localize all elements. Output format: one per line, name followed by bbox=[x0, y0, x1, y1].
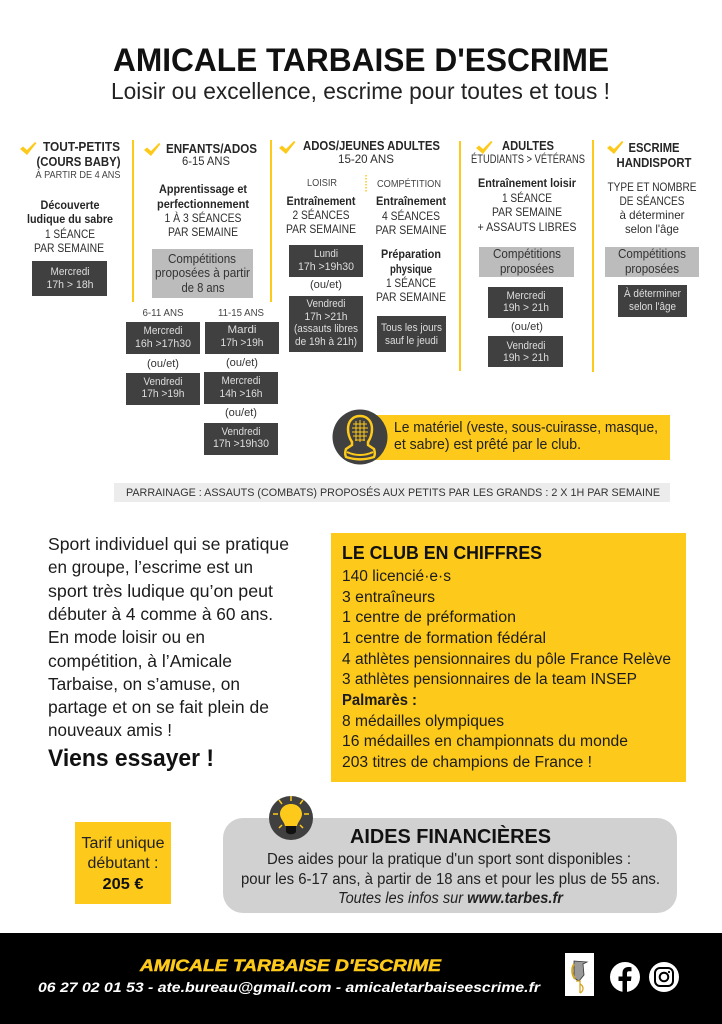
panel: le club en chiffres: 8 médailles olympiques bbox=[342, 713, 504, 730]
callout: compétitions enfants: proposées à partir bbox=[155, 266, 250, 280]
icon: light bulb bbox=[269, 796, 313, 840]
icon: instagram bbox=[649, 962, 679, 992]
text block: présentation: nouveaux amis ! bbox=[48, 720, 172, 740]
text: description adultes: Entraînement loisir bbox=[478, 176, 576, 190]
schedule box: lundi bbox=[289, 245, 363, 277]
schedule box: à déterminer: selon l'âge bbox=[629, 301, 676, 313]
panel: enfants/ados bbox=[126, 142, 279, 455]
text: description tout-petits bbox=[27, 198, 113, 255]
schedule box: à déterminer bbox=[618, 285, 687, 317]
text: matériel: et sabre) est prêté par le club. bbox=[394, 437, 581, 453]
schedule box: vendredi ados: 17h >21h bbox=[304, 311, 348, 323]
callout: compétitions enfants: de 8 ans bbox=[182, 281, 224, 295]
panel: le club en chiffres: 140 licencié·e·s bbox=[342, 568, 451, 585]
callout: tarif: Tarif unique bbox=[82, 835, 164, 852]
footer bbox=[0, 933, 722, 1024]
text: description handisport: selon l'âge bbox=[625, 222, 679, 236]
text: compétition: Entraînement bbox=[376, 194, 446, 208]
label: loisir: LOISIR bbox=[307, 178, 337, 189]
panel: le club en chiffres: 16 médailles en championnats du monde bbox=[342, 733, 628, 750]
text: aides: Toutes les infos sur www.tarbes.fr bbox=[338, 890, 564, 907]
icon: check enfants bbox=[144, 143, 160, 156]
text: compétition: physique bbox=[390, 262, 432, 276]
panel: le club en chiffres: 3 entraîneurs bbox=[342, 589, 435, 606]
label: ou/et: (ou/et) bbox=[225, 407, 257, 419]
callout: tarif: 205 € bbox=[102, 876, 144, 893]
schedule box: vendredi 11-15 bbox=[204, 423, 278, 455]
label: ou/et: (ou/et) bbox=[310, 279, 342, 291]
panel: escrime handisport bbox=[605, 141, 699, 317]
icon: check tout-petits bbox=[20, 142, 36, 155]
panel: le club en chiffres: LE CLUB EN CHIFFRES bbox=[342, 543, 542, 563]
text block: présentation bbox=[48, 534, 289, 772]
text block: présentation: Viens essayer ! bbox=[48, 745, 214, 772]
callout: compétitions handisport: Compétitions bbox=[618, 247, 686, 261]
heading: escrime handisport: HANDISPORT bbox=[616, 156, 692, 170]
heading: escrime handisport bbox=[616, 141, 692, 170]
schedule box: mercredi 11-15 bbox=[204, 372, 278, 404]
panel: le club en chiffres: 4 athlètes pensionnaires du pôle France Relève bbox=[342, 651, 671, 668]
schedule box: vendredi ados bbox=[289, 296, 363, 352]
schedule box: mardi 11-15: 17h >19h bbox=[220, 337, 264, 349]
text block: présentation: Tarbaise, on s’amuse, on bbox=[48, 674, 240, 694]
schedule box: vendredi adultes bbox=[488, 336, 563, 367]
schedule box: mercredi 6-11 bbox=[126, 322, 200, 354]
text: compétition: 1 SÉANCE bbox=[386, 275, 436, 290]
text: description enfants bbox=[157, 182, 249, 239]
callout: parrainage bbox=[114, 483, 670, 502]
heading: tout-petits: À PARTIR DE 4 ANS bbox=[36, 168, 121, 181]
heading: enfants/ados: 6-15 ANS bbox=[182, 154, 230, 168]
schedule box: mercredi: Mercredi bbox=[50, 266, 90, 278]
schedule box: mercredi adultes bbox=[488, 287, 563, 318]
panel: le club en chiffres: Palmarès : bbox=[342, 692, 417, 709]
schedule box: vendredi ados: (assauts libres bbox=[294, 323, 358, 335]
heading: adultes: ÉTUDIANTS > VÉTÉRANS bbox=[471, 151, 585, 166]
callout: tarif: débutant : bbox=[88, 855, 158, 872]
text: matériel: Le matériel (veste, sous-cuirasse, masque, bbox=[394, 420, 658, 436]
label: 11-15 ans: 11-15 ANS bbox=[218, 308, 264, 319]
heading: ados/jeunes adultes bbox=[303, 139, 440, 166]
text: description tout-petits: PAR SEMAINE bbox=[34, 241, 104, 255]
panel: le club en chiffres: 1 centre de préformation bbox=[342, 609, 516, 626]
icon: check ados bbox=[279, 141, 296, 154]
callout: compétitions adultes: proposées bbox=[500, 262, 554, 276]
heading: enfants/ados: ENFANTS/ADOS bbox=[166, 142, 257, 156]
callout: parrainage: PARRAINAGE : ASSAUTS (COMBATS) PROPOSÉS AUX PETITS PAR LES GRANDS : 2 X 1H PAR SEMAINE bbox=[126, 486, 660, 499]
schedule box: mercredi adultes: Mercredi bbox=[506, 290, 546, 302]
schedule box: lundi: 17h >19h30 bbox=[298, 261, 354, 273]
subtitle: Loisir ou excellence, escrime pour toutes et tous ! bbox=[111, 78, 610, 104]
text: description adultes: PAR SEMAINE bbox=[492, 205, 562, 219]
schedule box: lundi: Lundi bbox=[314, 248, 338, 260]
heading: enfants/ados bbox=[166, 142, 257, 168]
label: ou/et: (ou/et) bbox=[511, 321, 543, 333]
callout: tarif bbox=[75, 822, 171, 904]
icon: club logo bbox=[565, 953, 594, 996]
panel: le club en chiffres bbox=[331, 533, 686, 782]
text: description adultes bbox=[478, 176, 576, 234]
icon: fencing mask bbox=[332, 410, 388, 464]
text: aides: Des aides pour la pratique d'un sport sont disponibles : bbox=[267, 851, 631, 868]
panel: le club en chiffres: 1 centre de formation fédéral bbox=[342, 630, 546, 647]
heading: ados/jeunes adultes: 15-20 ANS bbox=[338, 152, 394, 166]
schedule box: mercredi 6-11: Mercredi bbox=[144, 325, 182, 337]
label: ou/et: (ou/et) bbox=[147, 358, 179, 370]
schedule box: tous les jours bbox=[377, 316, 446, 352]
text: description enfants: perfectionnement bbox=[157, 197, 249, 211]
schedule box: à déterminer: À déterminer bbox=[624, 287, 681, 300]
schedule box: mercredi adultes: 19h > 21h bbox=[503, 302, 549, 314]
text: description tout-petits: 1 SÉANCE bbox=[45, 226, 95, 241]
label: 6-11 ans: 6-11 ANS bbox=[142, 308, 184, 319]
text: compétition bbox=[376, 194, 446, 304]
schedule box: vendredi 6-11 bbox=[126, 373, 200, 405]
schedule box: vendredi 11-15: 17h >19h30 bbox=[213, 438, 269, 450]
schedule box: mardi 11-15: Mardi bbox=[228, 324, 256, 336]
text: matériel bbox=[394, 420, 658, 453]
text: compétition: 4 SÉANCES bbox=[382, 208, 440, 223]
title: AMICALE TARBAISE D'ESCRIME bbox=[113, 42, 609, 78]
callout: compétitions enfants bbox=[152, 249, 253, 298]
schedule box: mercredi 11-15: Mercredi bbox=[222, 375, 260, 387]
panel: le club en chiffres: 203 titres de champions de France ! bbox=[342, 754, 592, 771]
schedule box: vendredi 6-11: Vendredi bbox=[144, 376, 182, 388]
text: aides: pour les 6-17 ans, à partir de 18 ans et pour les plus de 55 ans. bbox=[241, 871, 660, 888]
panel: tout-petits bbox=[20, 140, 121, 296]
text: loisir: Entraînement bbox=[286, 194, 356, 208]
callout: compétitions adultes: Compétitions bbox=[493, 247, 561, 261]
text: description tout-petits: ludique du sabre bbox=[27, 212, 113, 226]
text: compétition: PAR SEMAINE bbox=[376, 290, 446, 304]
heading: adultes bbox=[471, 139, 585, 166]
callout: compétitions enfants: Compétitions bbox=[168, 252, 236, 266]
text block: présentation: compétition, à l’Amicale bbox=[48, 651, 232, 671]
schedule box: vendredi adultes: 19h > 21h bbox=[503, 352, 549, 364]
schedule box: mercredi: 17h > 18h bbox=[46, 279, 94, 291]
text block: présentation: débuter à 4 comme à 60 ans. bbox=[48, 604, 273, 624]
callout: matériel prêté bbox=[332, 410, 670, 464]
schedule box: mercredi 11-15: 14h >16h bbox=[220, 388, 262, 400]
callout: compétitions handisport bbox=[605, 247, 699, 277]
schedule box: vendredi adultes: Vendredi bbox=[506, 340, 546, 352]
text block: présentation: sport très ludique qu’on peut bbox=[48, 581, 273, 601]
text: loisir bbox=[286, 194, 356, 236]
callout: compétitions adultes bbox=[479, 247, 574, 277]
heading: adultes: ADULTES bbox=[502, 139, 554, 153]
icon: check adultes bbox=[476, 141, 492, 154]
text block: présentation: en groupe, l’escrime est un bbox=[48, 557, 253, 577]
label: ou/et: (ou/et) bbox=[226, 357, 258, 369]
text: aides bbox=[241, 851, 660, 907]
heading: aides financières: AIDES FINANCIÈRES bbox=[350, 825, 551, 848]
text: description enfants: Apprentissage et bbox=[159, 182, 247, 196]
icon: facebook bbox=[610, 962, 640, 992]
text: loisir: 2 SÉANCES bbox=[292, 207, 350, 222]
text: description tout-petits: Découverte bbox=[40, 198, 100, 212]
schedule box: mardi 11-15 bbox=[205, 322, 279, 354]
panel: ados/jeunes adultes bbox=[279, 139, 446, 352]
heading: escrime handisport: ESCRIME bbox=[628, 141, 680, 155]
schedule box: vendredi ados: de 19h à 21h) bbox=[295, 336, 357, 348]
text block: présentation: Sport individuel qui se pratique bbox=[48, 534, 289, 554]
footer contact: 06 27 02 01 53 - ate.bureau@gmail.com - amicaletarbaiseescrime.fr bbox=[38, 980, 541, 995]
text block: présentation: partage et on se fait plein de bbox=[48, 697, 269, 717]
text: description handisport: à déterminer bbox=[620, 208, 684, 222]
schedule box: tous les jours: sauf le jeudi bbox=[385, 335, 438, 347]
text: loisir: PAR SEMAINE bbox=[286, 222, 356, 236]
heading: tout-petits bbox=[36, 140, 121, 181]
text: description handisport: DE SÉANCES bbox=[620, 193, 684, 208]
schedule box: mercredi bbox=[32, 261, 107, 296]
heading: tout-petits: TOUT-PETITS bbox=[43, 140, 120, 154]
text: description enfants: PAR SEMAINE bbox=[168, 225, 238, 239]
panel: aides financières bbox=[223, 796, 677, 913]
footer title: AMICALE TARBAISE D'ESCRIME bbox=[139, 956, 442, 975]
panel: le club en chiffres: 3 athlètes pensionnaires de la team INSEP bbox=[342, 671, 637, 688]
text block: présentation: En mode loisir ou en bbox=[48, 627, 205, 647]
heading: tout-petits: (COURS BABY) bbox=[36, 155, 120, 169]
schedule box: vendredi 11-15: Vendredi bbox=[222, 426, 260, 438]
panel: adultes bbox=[471, 139, 585, 367]
heading: ados/jeunes adultes: ADOS/JEUNES ADULTES bbox=[303, 139, 440, 153]
text: compétition: Préparation bbox=[381, 247, 441, 261]
schedule box: vendredi ados: Vendredi bbox=[306, 298, 346, 310]
schedule box: vendredi 6-11: 17h >19h bbox=[142, 388, 184, 400]
label: compétition: COMPÉTITION bbox=[377, 177, 441, 190]
text: description adultes: 1 SÉANCE bbox=[502, 190, 552, 205]
text: description adultes: + ASSAUTS LIBRES bbox=[478, 220, 576, 234]
text: compétition: PAR SEMAINE bbox=[376, 223, 446, 237]
schedule box: tous les jours: Tous les jours bbox=[381, 322, 442, 334]
callout: compétitions handisport: proposées bbox=[625, 262, 679, 276]
icon: check handisport bbox=[607, 141, 624, 154]
text: description handisport: TYPE ET NOMBRE bbox=[608, 180, 696, 194]
text: description enfants: 1 À 3 SÉANCES bbox=[164, 210, 242, 225]
schedule box: mercredi 6-11: 16h >17h30 bbox=[135, 338, 191, 350]
text: description handisport bbox=[608, 180, 696, 236]
